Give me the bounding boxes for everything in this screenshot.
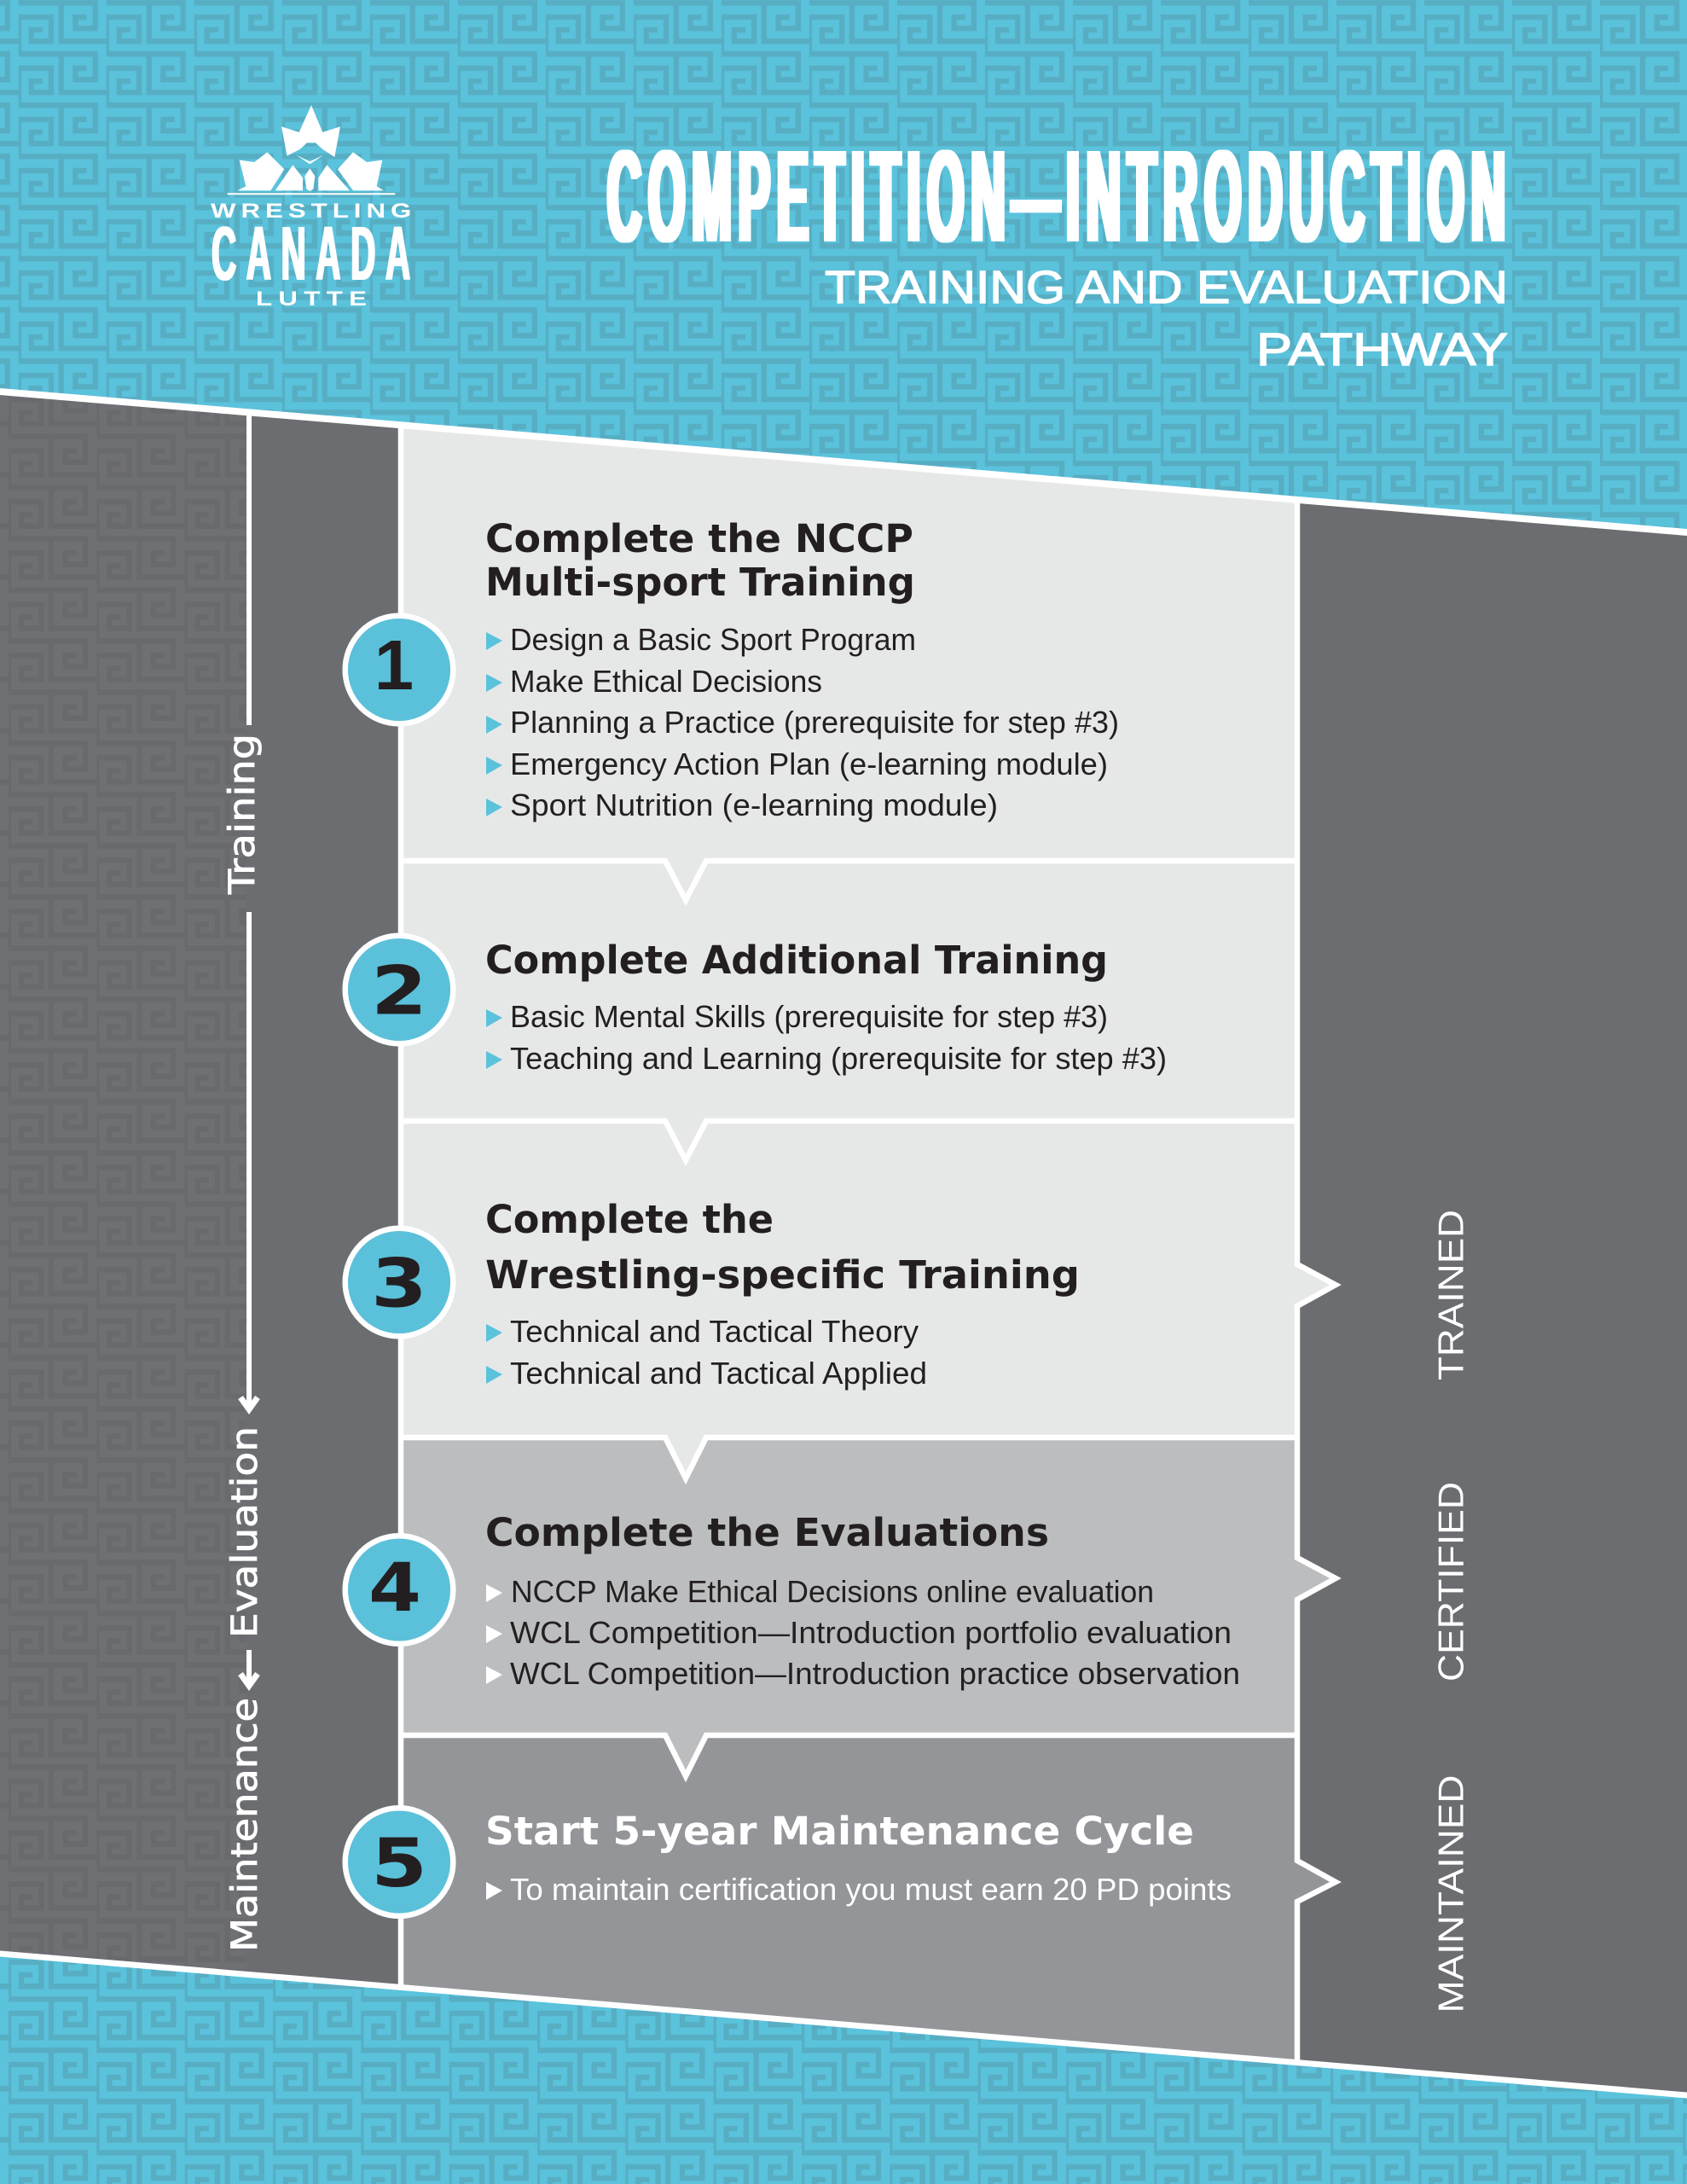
step 3 content: Technical and Tactical Theory — [510, 1314, 919, 1349]
step 2 content: Teaching and Learning (prerequisite for step #3) — [510, 1041, 1167, 1076]
step 4 content — [485, 1510, 1240, 1691]
panel: step 1 to 3 background — [401, 425, 1336, 1438]
side timeline: Training, Evaluation, Maintenance: Maintenance — [223, 1698, 265, 1952]
step 5 number badge: 5 — [371, 1826, 427, 1902]
step 2 content — [485, 938, 1167, 1076]
step 1 content: Make Ethical Decisions — [510, 664, 822, 699]
subtitle line 1: TRAINING AND EVALUATION — [825, 262, 1508, 313]
left vertical rule — [398, 425, 403, 1987]
notch fill: step 4 into step 5 — [665, 1735, 706, 1776]
logo: Wrestling Canada Lutte — [211, 105, 411, 310]
step 1 content: Design a Basic Sport Program — [510, 622, 916, 657]
step 1 number badge: 1 — [374, 625, 414, 705]
panel: step 5 background — [401, 1735, 1336, 2062]
step 4 content: WCL Competition—Introduction portfolio evaluation — [510, 1615, 1232, 1650]
title: COMPETITION—INTRODUCTION — [607, 122, 1505, 270]
step 2 content: Basic Mental Skills (prerequisite for step #3) — [510, 999, 1108, 1034]
divider with notch: step 4 to 5 — [401, 1735, 1297, 1776]
step 5 content: Start 5-year Maintenance Cycle — [485, 1809, 1194, 1854]
step 4 content: WCL Competition—Introduction practice observation — [510, 1656, 1240, 1691]
divider with notch: step 2 to 3 — [401, 1121, 1297, 1160]
step 4 content: Complete the Evaluations — [485, 1510, 1049, 1555]
notch fill: step 3 into step 4 — [665, 1438, 706, 1478]
step 2 number badge: 2 — [371, 954, 427, 1031]
logo word: WRESTLING: WRESTLING — [211, 199, 411, 222]
step 4 number badge — [345, 1536, 453, 1644]
step 1 content: Planning a Practice (prerequisite for step #3) — [510, 705, 1119, 740]
bottom diagonal white edge — [0, 1954, 1687, 2095]
step 1 number badge — [345, 616, 453, 723]
panel: grey band — [0, 392, 1687, 2095]
step 1 content: Emergency Action Plan (e-learning module) — [510, 746, 1108, 781]
right vertical rule with status arrows — [1297, 500, 1336, 2062]
step 2 number badge — [345, 936, 453, 1043]
side timeline: Training, Evaluation, Maintenance: Training — [221, 734, 263, 895]
step 3 content: Technical and Tactical Applied — [510, 1356, 927, 1391]
divider with notch: step 1 to 2 — [401, 861, 1297, 900]
side timeline: Training, Evaluation, Maintenance: Evaluation — [223, 1426, 265, 1638]
step 3 content: Wrestling-specific Training — [485, 1252, 1080, 1298]
step 2 content: Complete Additional Training — [485, 938, 1108, 983]
step 4 number badge: 4 — [368, 1550, 421, 1627]
status label: CERTIFIED: CERTIFIED — [1431, 1482, 1470, 1682]
step 1 content: Complete the NCCP — [485, 516, 913, 561]
logo word: CANADA: CANADA — [212, 211, 410, 296]
status label: MAINTAINED: MAINTAINED — [1431, 1774, 1470, 2013]
status label: TRAINED: TRAINED — [1431, 1210, 1470, 1380]
logo word: LUTTE: LUTTE — [256, 287, 367, 310]
icon: maple leaf and wrestler — [228, 105, 395, 195]
step 1 content: Sport Nutrition (e-learning module) — [510, 787, 998, 822]
step 5 number badge — [345, 1808, 453, 1916]
step 3 number badge — [345, 1228, 453, 1336]
step 4 content: NCCP Make Ethical Decisions online evaluation — [511, 1574, 1154, 1609]
step 5 content — [485, 1809, 1232, 1907]
side timeline: Training, Evaluation, Maintenance — [221, 412, 265, 1952]
step 1 content — [485, 516, 1119, 822]
background: top blue key pattern — [0, 0, 1687, 597]
panel: step 4 background — [401, 1438, 1336, 1735]
divider with notch: step 3 to 4 — [401, 1438, 1297, 1478]
step 3 content: Complete the — [485, 1197, 774, 1242]
step 1 content: Multi-sport Training — [485, 560, 915, 605]
subtitle line 2: PATHWAY — [1256, 324, 1508, 375]
step 3 number badge: 3 — [371, 1246, 427, 1322]
background: bottom blue key pattern — [0, 1877, 1687, 2184]
panel: left patterned column — [0, 392, 246, 1974]
step 3 content — [485, 1197, 1080, 1391]
top diagonal white edge — [0, 392, 1687, 532]
step 5 content: To maintain certification you must earn 20 PD points — [510, 1872, 1232, 1907]
